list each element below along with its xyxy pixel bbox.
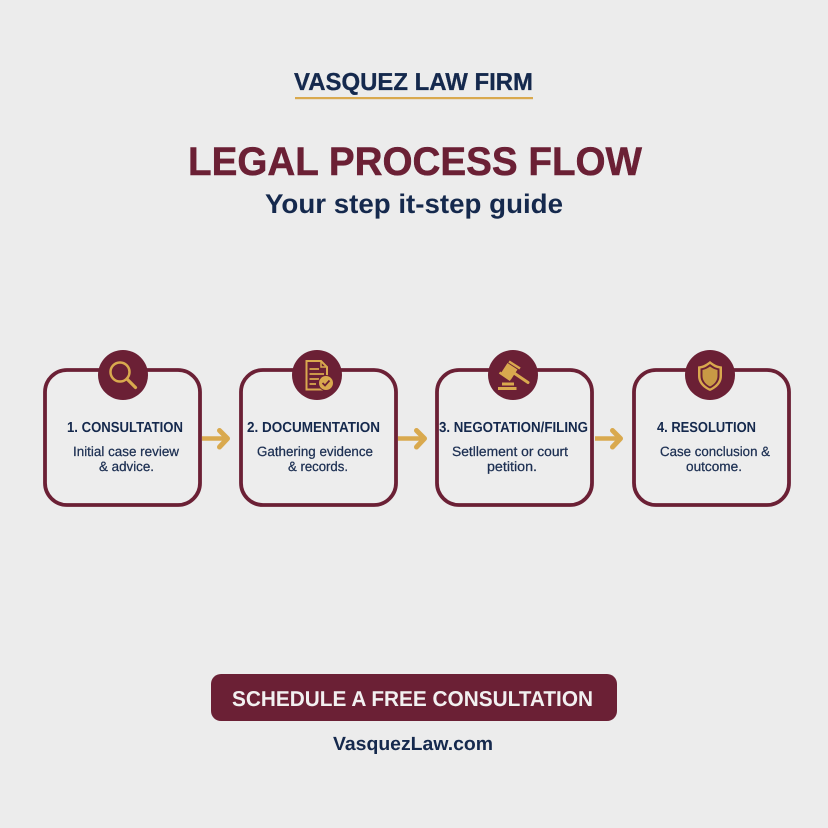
step 4 description: Case conclusion &	[660, 444, 770, 459]
arrow: step 3 to step 4	[595, 430, 620, 447]
step 3 description: Setllement or court	[452, 444, 568, 459]
step 2 description: Gathering evidence	[257, 444, 373, 459]
icon: gavel	[488, 350, 538, 400]
panel: step 1 consultation	[45, 350, 200, 505]
subtitle: Your step it-step guide	[265, 189, 563, 219]
step 4 heading: 4. RESOLUTION	[657, 420, 756, 436]
icon: document with check badge	[292, 350, 342, 400]
step 3 heading: 3. NEGOTATION/FILING	[439, 420, 588, 436]
panel: step 2 documentation	[241, 350, 396, 505]
step 4 description: outcome.	[686, 459, 742, 474]
panel: step 4 resolution	[634, 350, 789, 505]
arrow: step 1 to step 2	[202, 430, 228, 447]
title: LEGAL PROCESS FLOW	[188, 140, 642, 184]
step 2 description	[257, 444, 373, 474]
icon: shield	[685, 350, 735, 400]
step 4 description	[660, 444, 770, 474]
step 2 description: & records.	[288, 459, 348, 474]
step 2 heading: 2. DOCUMENTATION	[247, 420, 380, 436]
step 1 description	[73, 444, 179, 474]
call-to-action button	[211, 674, 617, 721]
website address: VasquezLaw.com	[333, 734, 493, 755]
step 3 description	[452, 444, 568, 474]
call-to-action button: SCHEDULE A FREE CONSULTATION	[232, 687, 593, 711]
panel: step 3 negotiation/filing	[437, 350, 592, 505]
arrow: step 2 to step 3	[398, 430, 424, 447]
step 1 description: & advice.	[99, 459, 154, 474]
step 3 description: petition.	[487, 459, 537, 474]
header: firm name with underline: VASQUEZ LAW FIRM	[294, 69, 533, 96]
step 1 heading: 1. CONSULTATION	[67, 420, 183, 436]
step 1 description: Initial case review	[73, 444, 179, 459]
icon: magnifying glass	[98, 350, 148, 400]
